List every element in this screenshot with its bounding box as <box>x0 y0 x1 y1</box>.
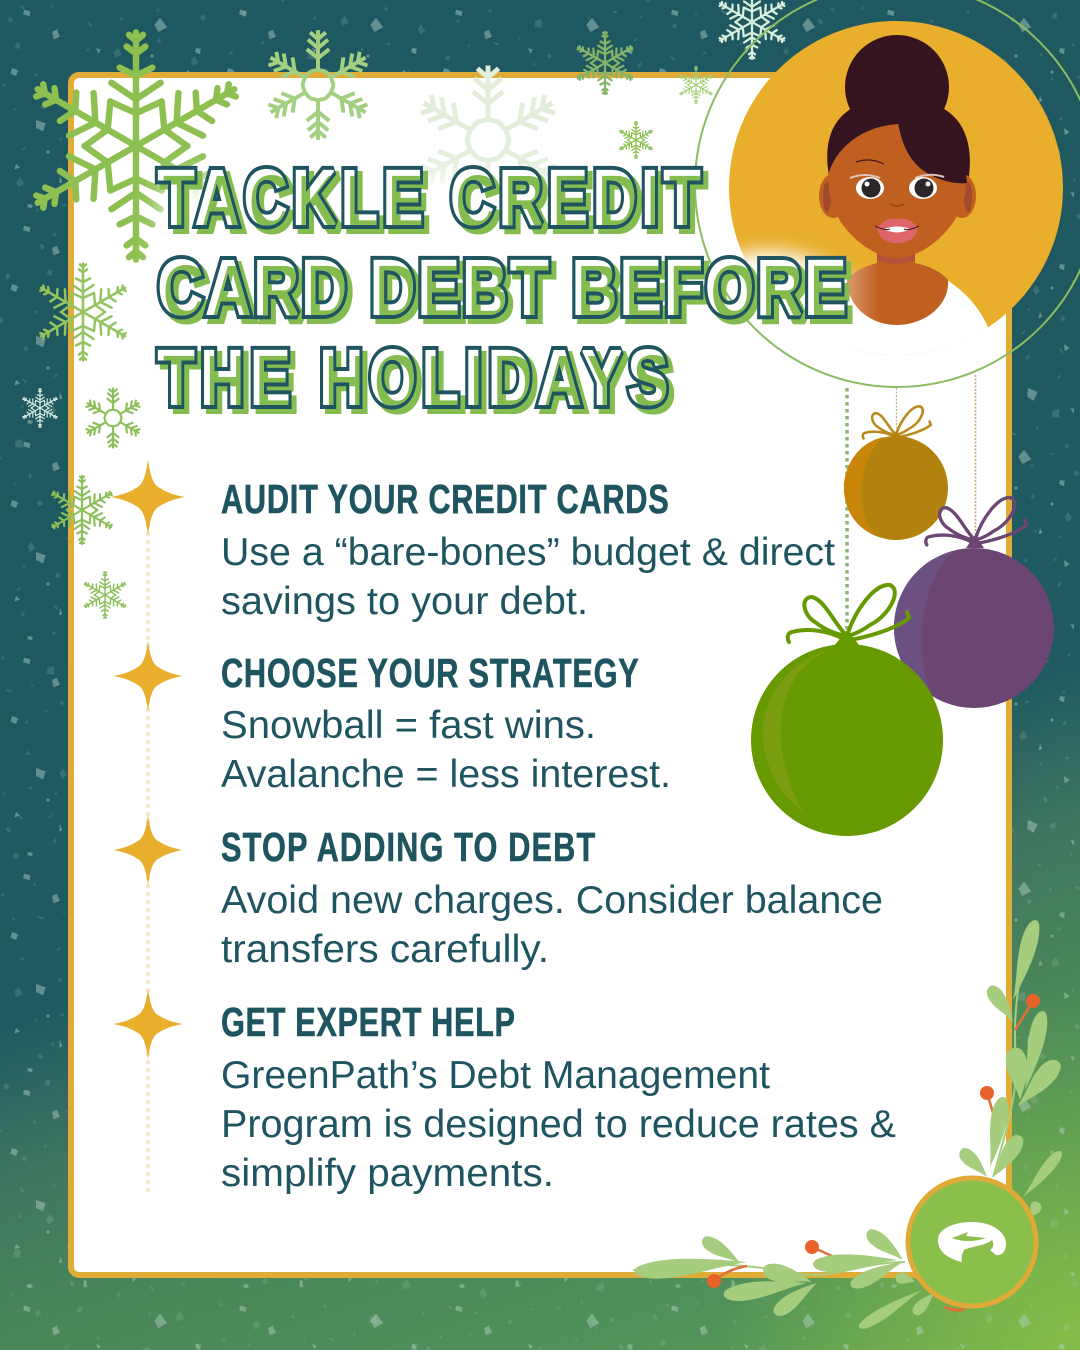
step 1 text: savings to your debt. <box>221 580 588 623</box>
step 1 text: AUDIT YOUR CREDIT CARDS <box>221 476 669 522</box>
logo badge <box>908 1178 1036 1310</box>
icon: snowflake near corner <box>678 67 714 103</box>
step 2 text <box>221 650 671 796</box>
timeline dotted line <box>146 500 150 1196</box>
step 2 text: CHOOSE YOUR STRATEGY <box>221 650 639 696</box>
ornament strings <box>847 375 976 632</box>
neck shadow <box>877 252 915 264</box>
ears <box>819 174 847 218</box>
step 1 text <box>221 476 835 623</box>
title inner green offset: CARD DEBT BEFORE <box>163 249 851 336</box>
berry stems <box>714 1001 1033 1281</box>
step 2 text: Snowball = fast wins. <box>221 704 596 747</box>
step 4 text: simplify payments. <box>221 1152 554 1195</box>
title dark outline: THE HOLIDAYS <box>158 335 668 421</box>
panel: white card <box>71 75 1009 1275</box>
eyebrows <box>856 158 940 164</box>
nose <box>890 204 904 206</box>
fringe <box>898 121 967 183</box>
icon: left snowflake three <box>49 476 115 544</box>
step 4 text <box>221 999 896 1195</box>
title white inner: CARD DEBT BEFORE <box>158 244 846 331</box>
icon: star 4 <box>114 989 182 1059</box>
step 2 text: Avalanche = less interest. <box>221 753 671 796</box>
title outer shadow <box>163 160 851 426</box>
portrait: woman <box>819 35 976 325</box>
title white inner: TACKLE CREDIT <box>158 155 700 241</box>
icon: gold circle behind portrait <box>729 21 1063 355</box>
title outer shadow: TACKLE CREDIT <box>163 160 705 246</box>
mouth <box>877 218 918 243</box>
title dark outline: CARD DEBT BEFORE <box>158 244 846 331</box>
vine leaves bottom <box>634 1225 939 1332</box>
step 4 text: Program is designed to reduce rates & <box>221 1103 896 1146</box>
icon: pale snowflake <box>416 66 560 214</box>
ornament: purple <box>894 498 1054 708</box>
neck and chest <box>847 248 948 325</box>
decorative vine and leaves <box>633 918 1066 1332</box>
ornament: gold <box>844 406 948 540</box>
title <box>158 155 851 426</box>
icon: star 1 <box>111 459 185 535</box>
step 3 text: Avoid new charges. Consider balance <box>221 879 883 922</box>
icon: logo mark <box>938 1222 1006 1262</box>
hair back <box>827 98 970 190</box>
ornament: green <box>751 585 943 836</box>
icon: star 3 <box>114 815 182 885</box>
title inner green offset: THE HOLIDAYS <box>163 340 673 426</box>
title dark outline: TACKLE CREDIT <box>158 155 700 241</box>
icon: white left snowflake <box>21 389 59 427</box>
icon: star 2 <box>114 641 182 711</box>
title white inner <box>158 155 846 421</box>
title dark outline <box>158 155 846 421</box>
snowflakes decoration <box>21 0 788 618</box>
vine leaves right <box>956 918 1066 1220</box>
icon: snowflake small top <box>575 32 635 94</box>
step 3 text <box>221 824 883 971</box>
icon: snowflake under top <box>618 122 654 158</box>
title outer shadow: CARD DEBT BEFORE <box>163 249 851 336</box>
step 4 text: GET EXPERT HELP <box>221 999 515 1045</box>
icon: left snowflake four <box>82 572 128 618</box>
eye liner <box>850 175 944 178</box>
title glow <box>165 178 695 403</box>
face <box>829 124 966 258</box>
icon: medium snowflake top <box>265 30 371 140</box>
vine stems <box>633 925 1036 1275</box>
icon: left snowflake one <box>35 264 131 360</box>
step 3 text: STOP ADDING TO DEBT <box>221 824 595 870</box>
title outer shadow: THE HOLIDAYS <box>163 340 673 426</box>
fade of gold circle at lower left <box>738 236 988 355</box>
hair bun <box>845 35 949 139</box>
icon: white snowflake top <box>716 0 788 59</box>
title white inner: THE HOLIDAYS <box>158 335 668 421</box>
title inner green offset: TACKLE CREDIT <box>163 160 705 246</box>
step 3 text: transfers carefully. <box>221 928 549 971</box>
eyes <box>856 177 884 199</box>
step 4 text: GreenPath’s Debt Management <box>221 1054 770 1097</box>
icon: large snowflake <box>25 33 247 259</box>
icon: left snowflake two <box>84 388 142 448</box>
title inner green offset <box>164 175 844 406</box>
step 1 text: Use a “bare-bones” budget & direct <box>221 531 835 574</box>
berries <box>707 994 1040 1288</box>
thin green ring <box>695 0 1080 387</box>
